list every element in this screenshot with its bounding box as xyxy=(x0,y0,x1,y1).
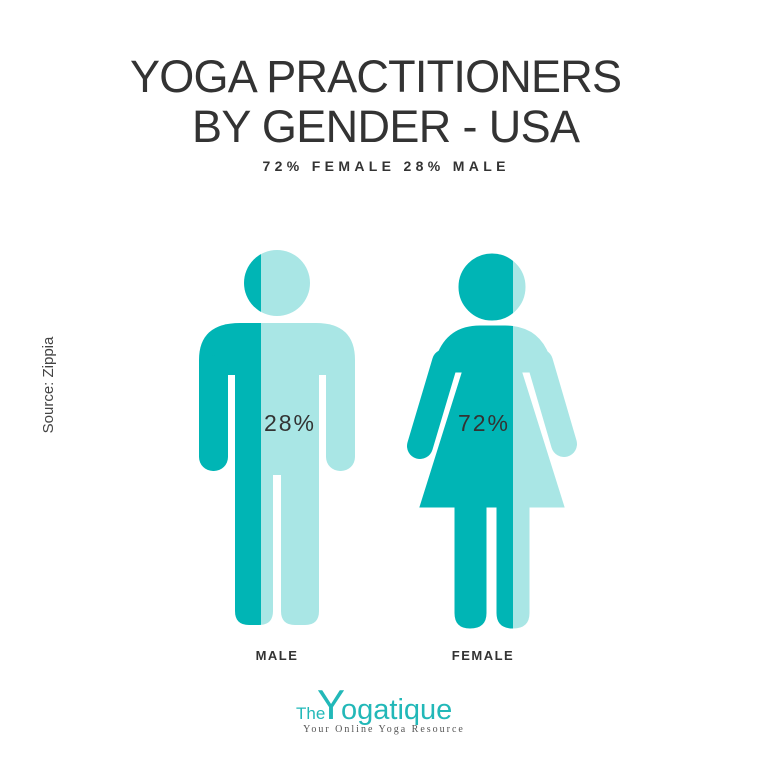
icon: female figure xyxy=(420,254,564,628)
logo: Y xyxy=(317,681,345,728)
label female: FEMALE xyxy=(452,648,514,663)
logo: Your Online Yoga Resource xyxy=(303,724,465,735)
logo xyxy=(296,681,465,735)
female percentage: 72% xyxy=(458,410,510,436)
title: YOGA PRACTITIONERS xyxy=(130,51,622,102)
male percentage: 28% xyxy=(264,410,316,436)
label male: MALE xyxy=(256,648,298,663)
logo: ogatique xyxy=(341,694,452,726)
source: Source: Zippia xyxy=(40,336,57,433)
subtitle: 72% FEMALE 28% MALE xyxy=(262,158,506,174)
icon: male figure xyxy=(199,250,355,625)
title: BY GENDER - USA xyxy=(192,101,580,152)
logo: The xyxy=(296,704,325,723)
title xyxy=(130,51,622,152)
